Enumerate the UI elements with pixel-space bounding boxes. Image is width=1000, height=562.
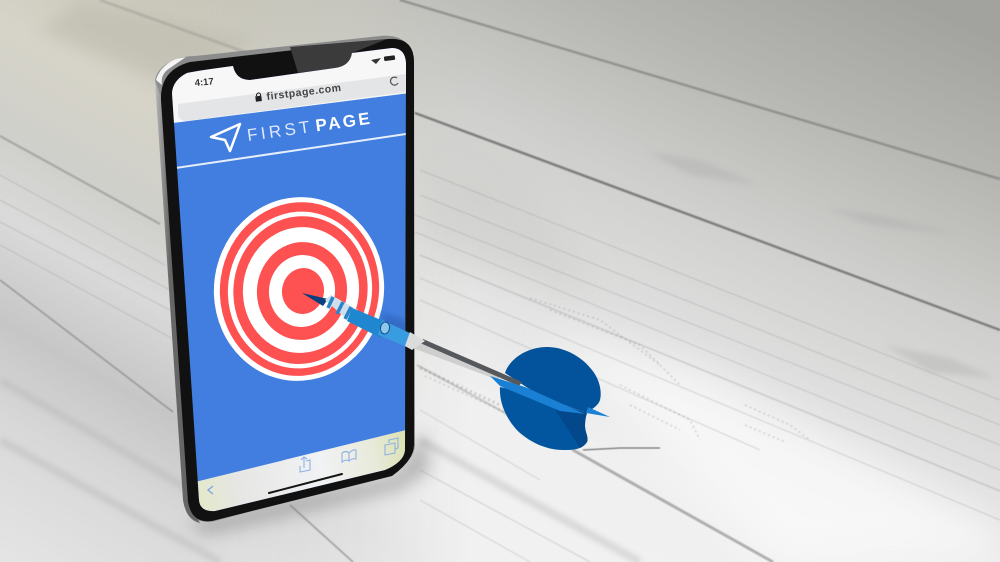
screen background (165, 40, 410, 520)
shaft dark side (420, 339, 522, 386)
logo wordmark: FIRSTPAGE (246, 109, 373, 145)
phone black bezel (161, 39, 414, 521)
url text: firstpage.com (266, 82, 342, 103)
header divider (176, 134, 406, 168)
status time: 4:17 (194, 76, 214, 89)
dart shadow on screen (378, 310, 406, 331)
bullseye (282, 268, 324, 314)
browser bottom toolbar (198, 430, 406, 512)
ring red 2 (233, 216, 368, 364)
share icon (300, 457, 310, 472)
dart needle point (302, 293, 328, 306)
ring white 2 (228, 212, 372, 368)
notch shade (290, 39, 387, 73)
grip stripes (328, 297, 351, 319)
dart flight back (505, 347, 601, 413)
ring red 3 (256, 242, 348, 340)
status icons (371, 55, 395, 64)
phone screen (165, 40, 410, 520)
logo paper plane (211, 124, 240, 151)
phone (155, 36, 415, 523)
phone left silver edge (155, 80, 200, 523)
bright fin (490, 376, 585, 414)
reload icon (390, 77, 398, 85)
dart knurled grip (325, 295, 358, 322)
flight shading (550, 402, 588, 448)
barrel collar (378, 320, 414, 348)
phone metal body (155, 36, 415, 522)
dart (302, 293, 610, 450)
target (214, 197, 384, 381)
dart blue barrel (347, 308, 386, 338)
tabs icon (385, 438, 398, 455)
wood knots (648, 152, 995, 378)
ring outer white (214, 197, 384, 381)
ring white 3 (242, 227, 360, 353)
plank grain lines (0, 170, 1000, 562)
fin tip (586, 407, 610, 417)
lock icon (255, 93, 262, 102)
left floor tone (0, 0, 418, 562)
shaft light side (410, 340, 500, 380)
soft plank streaks (0, 380, 640, 562)
wifi icon (371, 58, 381, 64)
browser top bar (172, 48, 406, 123)
back arrow icon (208, 486, 213, 494)
ring red 1 (220, 202, 380, 376)
ring white 4 (268, 255, 336, 327)
silver nub (405, 332, 425, 350)
url bar (178, 74, 406, 121)
bookmarks icon (342, 450, 356, 462)
phone shadow (188, 430, 430, 535)
home indicator (269, 474, 342, 493)
rough wood texture (420, 298, 810, 442)
top highlight (156, 57, 186, 85)
battery icon (384, 55, 395, 61)
barrel marker (380, 321, 390, 335)
dart shaft (410, 339, 522, 386)
dart flight front (500, 387, 588, 450)
